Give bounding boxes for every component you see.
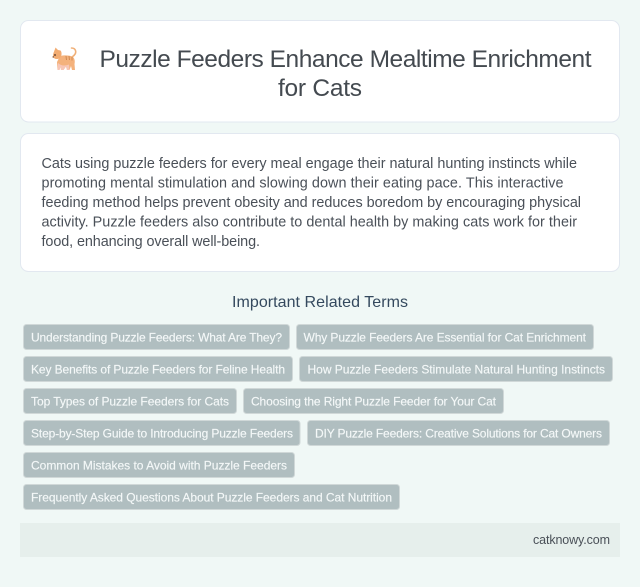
icon: cat — [52, 48, 76, 70]
chip: understanding — [24, 324, 290, 350]
chip: top types: Top Types of Puzzle Feeders for Cats — [31, 394, 229, 408]
chip: hunting instincts: How Puzzle Feeders Stimulate Natural Hunting Instincts — [308, 362, 605, 376]
text block: description: food, enhancing overall well-being. — [42, 234, 260, 250]
chip: choosing — [244, 388, 504, 414]
chip: step-by-step: Step-by-Step Guide to Introducing Puzzle Feeders — [31, 426, 293, 440]
chip: common mistakes: Common Mistakes to Avoid with Puzzle Feeders — [31, 458, 287, 472]
chip: choosing: Choosing the Right Puzzle Feeder for Your Cat — [251, 394, 497, 408]
heading: related terms: Important Related Terms — [232, 294, 408, 311]
chip: why essential — [296, 324, 594, 350]
text block: description: Cats using puzzle feeders for every meal engage their natural hunting instincts while — [42, 156, 577, 172]
chip: understanding: Understanding Puzzle Feeders: What Are They? — [31, 330, 282, 344]
footer credit: catknowy.com — [533, 533, 610, 547]
panel: header — [20, 20, 620, 122]
chip: DIY: DIY Puzzle Feeders: Creative Solutions for Cat Owners — [315, 426, 602, 440]
text block: description: feeding method helps prevent obesity and reduces boredom by encouraging physical — [42, 195, 581, 211]
chip: FAQ: Frequently Asked Questions About Puzzle Feeders and Cat Nutrition — [31, 490, 392, 504]
title: Puzzle Feeders Enhance Mealtime Enrichment — [100, 46, 592, 73]
footer — [20, 523, 620, 557]
chip: FAQ — [24, 484, 400, 510]
panel: description — [20, 134, 620, 272]
text block: description — [42, 156, 581, 250]
chip: why essential: Why Puzzle Feeders Are Essential for Cat Enrichment — [304, 330, 587, 344]
related terms chips — [24, 324, 612, 510]
text block: description: promoting mental stimulation and slowing down their eating pace. This interactive — [42, 176, 564, 192]
chip: step-by-step — [24, 420, 300, 446]
chip: key benefits: Key Benefits of Puzzle Feeders for Feline Health — [31, 362, 285, 376]
chip: DIY — [308, 420, 610, 446]
text block: description: activity. Puzzle feeders also contribute to dental health by making cats work for their — [42, 214, 577, 230]
title: for Cats — [278, 75, 362, 102]
chip: top types — [24, 388, 236, 414]
chip: key benefits — [24, 356, 292, 382]
chip: common mistakes — [24, 452, 294, 478]
title — [100, 46, 592, 102]
chip: hunting instincts — [300, 356, 612, 382]
